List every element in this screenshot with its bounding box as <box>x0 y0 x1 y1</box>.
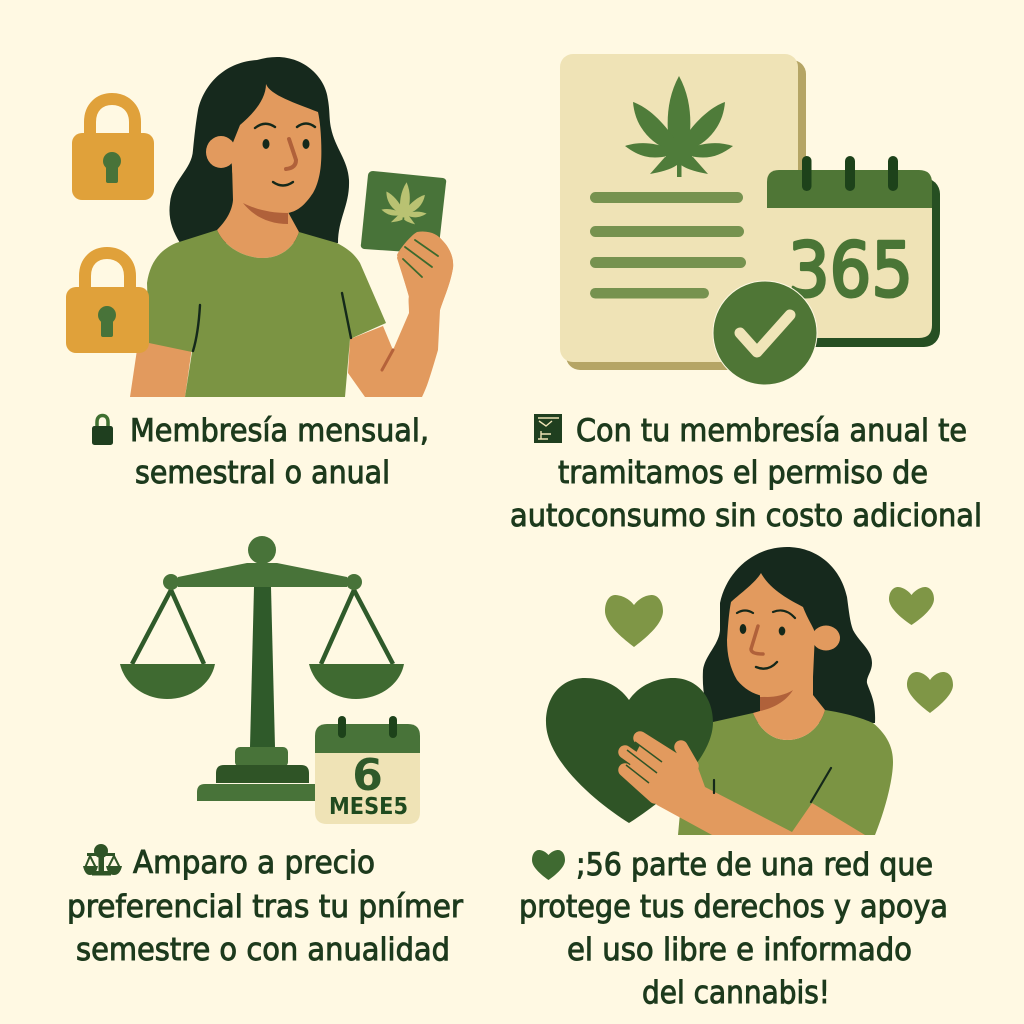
big heart <box>546 678 713 823</box>
text: amparo caption: semestre o con anualidad <box>76 932 450 968</box>
text: community caption: protege tus derechos y apoya <box>519 889 948 925</box>
icon: small scale <box>83 844 122 876</box>
icon: cannabis leaf <box>625 76 733 177</box>
calendar 365: 365 <box>788 226 913 314</box>
icon: upper padlock <box>72 99 154 200</box>
panel: scale of justice illustration <box>120 536 420 824</box>
icon: small document <box>534 414 562 443</box>
text: amparo caption: Amparo a precio <box>133 845 375 881</box>
text: amparo caption <box>67 844 463 968</box>
text: membership caption <box>92 413 429 491</box>
icon: heart lower right <box>907 672 953 713</box>
text: community caption: del cannabis! <box>642 975 830 1011</box>
woman holding membership card <box>130 57 453 397</box>
icon: card leaf <box>380 180 429 225</box>
text: community caption <box>519 847 948 1011</box>
icon: small lock <box>92 416 113 445</box>
text: community caption: ;56 parte de una red que <box>576 847 933 883</box>
card <box>361 171 446 254</box>
icon: heart left <box>605 595 663 647</box>
text: annual membership caption: Con tu membresía anual te <box>576 413 967 449</box>
text: membership caption: Membresía mensual, <box>130 413 429 449</box>
calendar: 6 meses: 6 <box>352 750 383 801</box>
icon: heart upper right <box>889 587 934 625</box>
arm and hand <box>625 738 865 835</box>
text: annual membership caption: tramitamos el permiso de <box>558 455 928 491</box>
scale <box>120 536 404 801</box>
woman holding heart <box>546 547 893 835</box>
panel: community illustration <box>546 547 953 835</box>
document <box>560 54 806 370</box>
calendar 365 <box>767 156 940 347</box>
text: membership caption: semestral o anual <box>135 455 390 491</box>
text: community caption: el uso libre e informado <box>567 932 912 968</box>
text: amparo caption: preferencial tras tu pnímer <box>67 889 463 925</box>
icon: lower padlock <box>66 253 149 353</box>
text: annual membership caption: autoconsumo sin costo adicional <box>510 498 982 534</box>
calendar: 6 meses: MESE5 <box>329 794 408 820</box>
panel: document and calendar illustration <box>560 54 940 385</box>
panel: membership illustration <box>66 57 453 397</box>
calendar: 6 meses <box>315 716 420 824</box>
icon: check badge <box>713 281 817 385</box>
icon: small heart <box>532 850 565 880</box>
text: annual membership caption <box>510 413 982 534</box>
